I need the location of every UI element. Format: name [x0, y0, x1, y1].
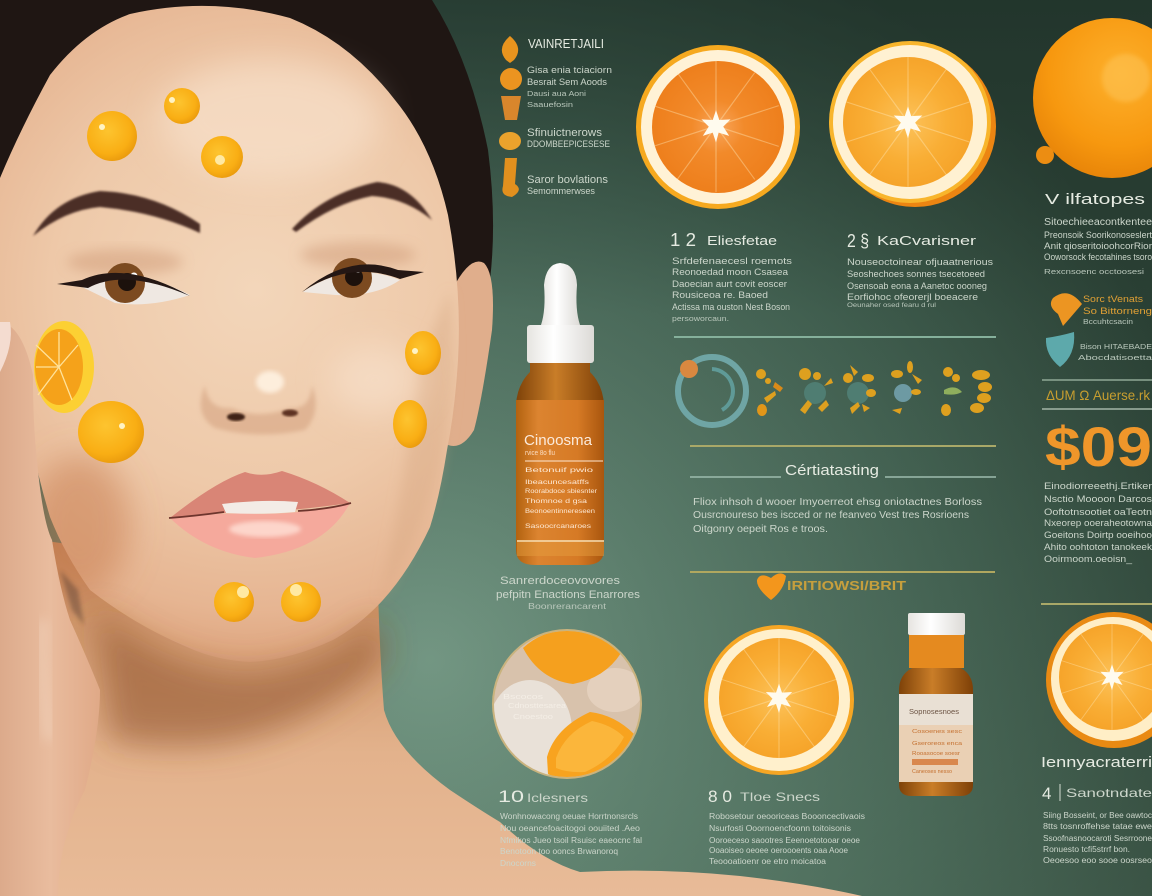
bottom block 3: Oeoesoo eoo sooe oosrseo: [1043, 856, 1152, 865]
label: Ibeacuncesatffs: [525, 479, 590, 486]
dropper collar: [527, 325, 594, 363]
icon: stem: [502, 158, 519, 197]
list text: Semommerwses: [527, 186, 596, 196]
label: rvice 8o flu: [525, 450, 555, 457]
serum drops: [34, 88, 441, 622]
bottle caption: Sanrerdoceovovores: [500, 575, 621, 587]
icon: teal shield heart: [1046, 332, 1074, 367]
bottom block 1: Nou oeancefoacitogoi oouiited .Aeo: [500, 824, 641, 833]
right column: paragraph: Einodiorreeethj.Ertiker: [1044, 481, 1152, 491]
section 2 text: [847, 231, 994, 309]
bottle caption: pefpitn Enactions Enarrores: [496, 589, 641, 601]
bottom block 2: Ooroeceso saootres Eeenoetotooar oeoe: [709, 836, 861, 845]
right column: big number: $09: [1045, 415, 1152, 478]
label: Roorabdoce sbiesnter: [525, 488, 598, 495]
icon: cluster 5: [941, 367, 992, 416]
bottom block 3: Sanotndate: [1066, 786, 1152, 800]
right column: paragraph: Goeitons Doirtp ooeihoo: [1044, 530, 1152, 540]
label: Gseroreos enca: [912, 741, 962, 747]
bottom block 3: 4: [1042, 784, 1051, 803]
label: Beonoentinnereseen: [525, 508, 595, 515]
section 2 text: Osensoab eona a Aanetoc oooneg: [847, 281, 987, 291]
bottle caption: Boonrerancarent: [528, 602, 607, 611]
cheek highlight: [330, 345, 420, 415]
centre paragraph: Ousrcnoureso bes iscced or ne feanveo Vest tres Rosrioens: [693, 510, 969, 521]
icon: cluster 2: [799, 368, 833, 414]
centre paragraph: Oitgonry oepeit Ros e troos.: [693, 524, 828, 535]
label: Betonuif pwio: [525, 467, 594, 474]
section: centre heading: Cértiatasting: [785, 462, 879, 479]
photo overlay text: Bscocos: [503, 694, 544, 701]
right column: paragraph: [1044, 481, 1152, 564]
neck and shoulder: [30, 540, 862, 896]
icon list: vitamin benefits: [499, 36, 612, 197]
icon: orange brain: [1051, 293, 1082, 326]
section 1 text: Rousiceoa re. Baoed: [672, 290, 768, 300]
small amber bottle: [899, 613, 973, 796]
bottom block 3: Ssoofnasnoocaroti Sesrroone: [1043, 834, 1152, 843]
bottle body: [516, 400, 604, 565]
bottom block 1: Nfmikos Jueo tsoil Rsuisc eaeocnc fal: [500, 836, 642, 845]
right column: icon notes: Sorc tVenats: [1083, 294, 1144, 304]
bottom block 2: Ooaoiseo oeoee oeroooents oaa Aooe: [709, 846, 849, 855]
label: Sasoocrcanaroes: [525, 523, 592, 530]
centre paragraph: Fliox inhsoh d wooer Imyoerreot ehsg oniotactnes Borloss: [693, 497, 982, 508]
ear: [448, 262, 493, 446]
right column: paragraph: Nxeorep ooeraheotowna: [1044, 518, 1152, 528]
bottom block 2: 8 0: [708, 787, 732, 806]
right column: icon notes: Bison HITAEBADE: [1080, 342, 1152, 351]
section 2 text: Nouseoctoinear ofjuaatnerious: [847, 257, 994, 267]
forehead highlight: [160, 60, 380, 180]
centre paragraph: [693, 497, 982, 535]
right column: paragraph: Nsctio Moooon Darcos: [1044, 494, 1152, 504]
lower-left cheek shading: [30, 455, 130, 595]
icon: cluster 1: [756, 369, 783, 416]
portrait: woman's face: [0, 0, 862, 896]
bottom block 2: Robosetour oeooriceas Boooncectivaois: [709, 812, 865, 821]
label: Cosoenes sesc: [912, 729, 963, 735]
right column: intro text: Preonsoik Soorikonoseslert: [1044, 230, 1152, 240]
section 2 text: Eorfiohoc ofeorerjl boeacere: [847, 292, 978, 302]
orange slice 1: [636, 45, 800, 209]
right column: intro text: Anit qioseritoioohcorRior: [1044, 241, 1152, 251]
collar: [909, 634, 964, 668]
hand: [0, 322, 100, 896]
hair: [0, 0, 493, 312]
icon: cup: [501, 96, 521, 120]
right column: icon notes: Bccuhtcsacin: [1083, 317, 1133, 326]
circular photo with orange slices: Cnoestoo: [513, 714, 553, 721]
bottom block 3: Iennyacraterri: [1041, 754, 1152, 771]
circular photo with orange slices: [488, 628, 645, 783]
bottle caption: [496, 575, 641, 611]
heading: list title: VAINRETJAILI: [528, 36, 604, 51]
section 1 text: persoworcaun.: [672, 314, 729, 323]
section 2 text: Oeunaher osed fearu d rul: [847, 303, 936, 309]
right column: intro text: Rexcnsoenc occtoosesi: [1044, 267, 1144, 276]
eyebrow left: [33, 191, 200, 236]
icon: cluster 4: [891, 361, 922, 414]
label: Rooasocoe soesr: [912, 751, 960, 757]
section 2 text: KaCvarisner: [877, 233, 977, 248]
section 1 text: Actissa ma ouston Nest Boson: [672, 302, 790, 312]
right column: paragraph: Ahito oohtoton tanokeek: [1044, 542, 1152, 552]
label: [899, 694, 973, 782]
list text: Dausi aua Aoni: [527, 89, 586, 98]
label: [524, 432, 603, 530]
list text: Saror bovlations: [527, 174, 608, 186]
section 1 text: Srfdefenaecesl roemots: [672, 256, 793, 266]
section 2 text: Seoshechoes sonnes tsecetoeed: [847, 269, 985, 279]
eyeshadow: [67, 249, 183, 275]
icon: cluster 3: [843, 365, 876, 414]
amber dropper bottle: [516, 263, 604, 565]
right column: icon notes: [1078, 294, 1152, 362]
bottom block 2: Tloe Snecs: [740, 790, 820, 804]
cap: [908, 613, 965, 635]
nose: [201, 260, 316, 435]
icon: bulb: [502, 36, 518, 63]
section 2 text: 2 §: [847, 231, 869, 251]
label: Caneoses nesso: [912, 769, 952, 775]
list text: Besrait Sem Aoods: [527, 77, 608, 87]
right column: icon notes: Abocdatisoetta: [1078, 353, 1152, 362]
label: Cinoosma: [524, 432, 593, 449]
bottom block 3: [1041, 754, 1152, 865]
bottom block 1: Benotoon too ooncs Brwanoroq: [500, 847, 618, 856]
right column: intro text: [1044, 191, 1152, 276]
label: Thomnoe d gsa: [525, 498, 588, 505]
label: Sopnosesnoes: [909, 709, 960, 716]
bottom block 3: Siing Bosseint, or Bee oawtoc: [1043, 811, 1152, 820]
dropper bulb: [541, 263, 580, 325]
bottom block 1: [498, 787, 642, 868]
icon: orange: [500, 68, 522, 90]
right column: icon notes: So Bittorneng: [1083, 306, 1152, 316]
bottom block 1: 10: [498, 787, 524, 806]
orange slice 3: [704, 625, 854, 775]
bottom block 2: Nsurfosti Ooornoencfoonn toitoisonis: [709, 824, 851, 833]
bottle neck and shoulders: [516, 363, 604, 420]
section 1 text: 1 2: [670, 230, 696, 250]
face skin: [0, 6, 459, 662]
section: nutrition banner with heart: [757, 573, 906, 600]
section 1 text: Reonoedad moon Csasea: [672, 267, 788, 277]
under-jaw shadow: [95, 610, 384, 746]
list text: Sfinuictnerows: [527, 127, 603, 139]
icon: ring diagram: [678, 357, 746, 425]
bottom block 2: [708, 787, 865, 866]
lips: [169, 471, 351, 558]
eye right: [302, 258, 424, 298]
right column: intro text: V ilfatopes: [1045, 191, 1145, 208]
section 1 text: Eliesfetae: [707, 233, 777, 248]
list text: DDOMBEEPICESESE: [527, 139, 610, 149]
bottom block 3: 8tts tosnroffehse tatae ewe: [1043, 822, 1152, 831]
right column: paragraph: Ooftotnsootiet oaTeotn: [1044, 507, 1152, 517]
orange slice 4: [1046, 612, 1152, 748]
list text: [527, 65, 612, 196]
orange slice 2: [829, 41, 996, 207]
right column: paragraph: Ooirmoom.oeoisn_: [1044, 554, 1133, 564]
bottle glass: [899, 668, 973, 796]
bottom block 3: Ronuesto tcfi5strrf bon.: [1043, 845, 1130, 854]
right column: intro text: Sitoechieeacontkentee: [1044, 217, 1152, 228]
eyebrow right: [292, 182, 432, 232]
face side shading: [380, 290, 453, 600]
icon: lens: [499, 132, 521, 150]
list text: Gisa enia tciaciorn: [527, 65, 612, 75]
section: nutrition banner with heart: IRITIOWSI/BRIT: [787, 578, 906, 593]
circular photo with orange slices: Cdnosttesarea: [508, 703, 566, 710]
eye left: [57, 263, 190, 304]
process icons row: [756, 361, 992, 416]
section 1 text: Daoecian aurt covit eoscer: [672, 279, 787, 289]
bottom block 1: Iclesners: [527, 791, 588, 805]
whole orange: [1033, 18, 1152, 178]
icon: heart: [757, 573, 786, 600]
bottom block 1: Dnocorns: [500, 859, 536, 868]
bottom block 1: Wonhnowacong oeuae Horrtnonsrcls: [500, 812, 638, 821]
list text: Saauefosin: [527, 100, 573, 109]
section 1 text: [670, 230, 793, 323]
bottom block 2: Teoooatioenr oe etro moicatoa: [709, 857, 827, 866]
